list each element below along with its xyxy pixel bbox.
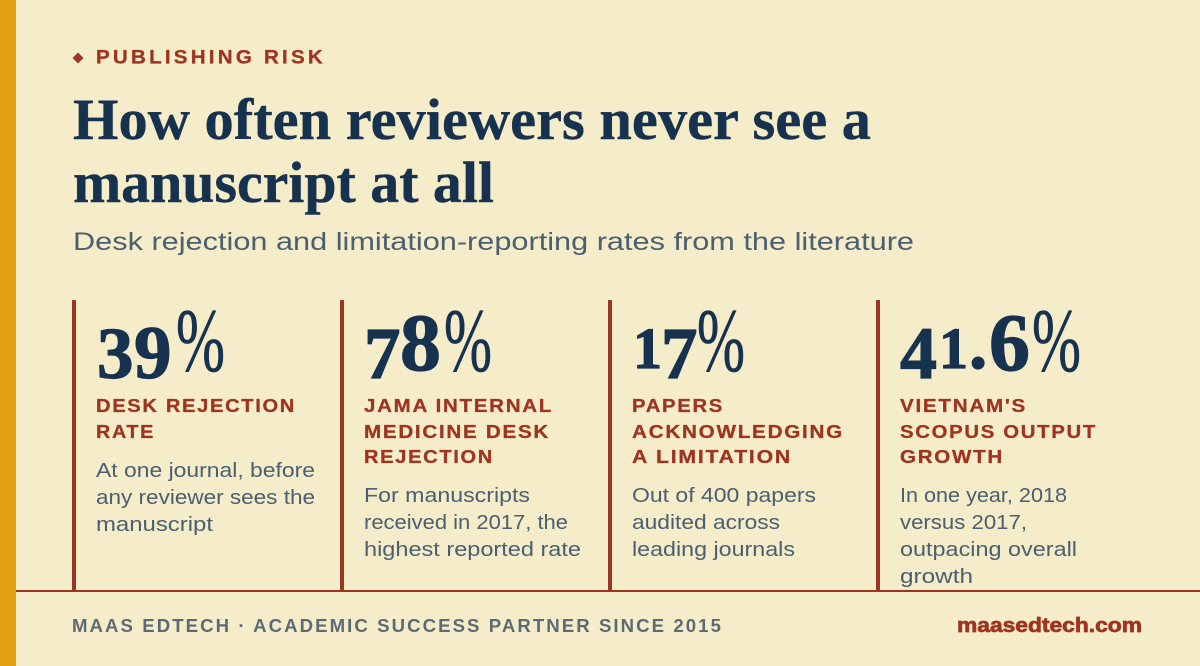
label: desk rejection rate [96,396,296,442]
label: desk rejection rate: DESK REJECTION [96,396,296,416]
label: papers acknowledging a limitation [632,396,844,467]
description: manuscript [96,514,214,536]
label: Vietnam's Scopus output growth: VIETNAM'S [900,396,1027,416]
stat: 78%: % [444,292,492,391]
panel: JAMA Internal Medicine desk rejection [340,292,581,591]
stat: 39%: 3 [97,313,134,394]
icon: diamond [72,52,84,64]
stat: 39% [97,292,225,395]
description: outpacing overall [900,539,1077,561]
stat: 41.6%: 1 [939,316,968,381]
description: In one year, 2018 [900,485,1067,507]
label: papers acknowledging a limitation: A LIMITATION [632,447,792,467]
description: Out of 400 papers [632,485,816,507]
label: papers acknowledging a limitation: ACKNOWLEDGING [632,422,844,442]
title [73,87,871,215]
stat: 17%: 1 [633,316,662,381]
stat: 17%: 7 [661,313,698,394]
description: audited across [632,512,780,534]
label: papers acknowledging a limitation: PAPERS [632,396,724,416]
description [96,460,315,536]
label: Vietnam's Scopus output growth [900,396,1097,467]
footer: website: maasedtech.com [957,615,1142,637]
description: growth [900,566,973,588]
stat: 41.6%: % [1032,292,1081,391]
title: How often reviewers never see a [73,87,871,152]
description: At one journal, before [96,460,315,482]
label: Vietnam's Scopus output growth: SCOPUS OUTPUT [900,422,1097,442]
stat: 78%: 8 [400,297,441,388]
stat: 41.6%: 6 [989,297,1030,388]
subtitle: Desk rejection and limitation-reporting rates from the literature [73,228,914,256]
stat: 39%: 9 [134,312,172,395]
stat: 41.6% [900,292,1081,395]
stat: 17% [633,292,745,394]
label: Vietnam's Scopus output growth: GROWTH [900,447,1004,467]
description: highest reported rate [364,539,581,561]
label: JAMA Internal Medicine desk rejection: MEDICINE DESK [364,422,550,442]
stat: 17%: % [697,292,745,391]
description: versus 2017, [900,512,1027,534]
panel: Vietnam's Scopus output growth [876,292,1097,591]
description [632,485,816,561]
description [364,485,581,561]
footer [72,615,1142,637]
panel: papers acknowledging a limitation [608,292,844,591]
stat: 78%: 7 [364,313,400,394]
label: desk rejection rate: RATE [96,422,155,442]
stat: 39%: % [176,292,225,391]
eyebrow text: PUBLISHING RISK [96,48,326,68]
description [900,485,1077,588]
title: manuscript at all [73,150,494,215]
eyebrow: publishing risk [72,48,326,68]
footer: organisation: MAAS EDTECH · ACADEMIC SUCCESS PARTNER SINCE 2015 [72,616,723,636]
stat: 41.6%: . [969,303,987,384]
description: received in 2017, the [364,512,568,534]
stat: 41.6%: 4 [900,313,937,395]
description: any reviewer sees the [96,487,315,509]
label: JAMA Internal Medicine desk rejection [364,396,553,467]
stat: 78% [364,292,492,394]
label: JAMA Internal Medicine desk rejection: REJECTION [364,447,494,467]
panel: desk rejection rate [72,292,315,591]
description: For manuscripts [364,485,530,507]
label: JAMA Internal Medicine desk rejection: JAMA INTERNAL [364,396,553,416]
description: leading journals [632,539,795,561]
